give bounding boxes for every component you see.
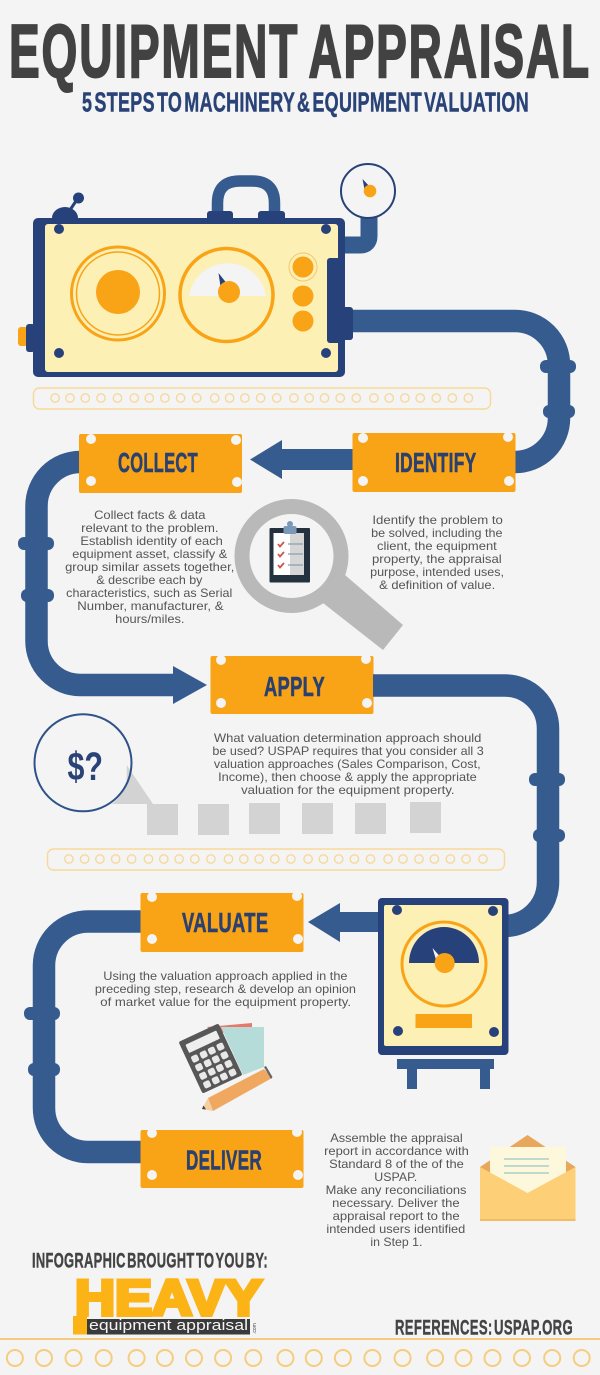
footer ring strip <box>0 1339 600 1366</box>
middle dial <box>180 248 273 342</box>
text: deliver description: in Step 1. <box>370 1235 422 1249</box>
text: apply description: be used? USPAP requires that you consider all 3 <box>212 744 484 758</box>
text: apply description: valuation for the equipment property. <box>241 783 455 797</box>
text: identify description: & definition of value. <box>379 578 495 592</box>
text: collect description: equipment asset, classify & <box>72 547 227 561</box>
text: deliver description: Standard 8 of the of the <box>329 1157 464 1171</box>
left knob <box>18 324 35 352</box>
text: valuate description: of market value for the equipment property. <box>100 995 351 1009</box>
text: apply description: What valuation determination approach should <box>214 731 481 745</box>
text: collect description: & describe each by <box>96 573 202 587</box>
pipe: apply to valuation machine <box>373 686 565 926</box>
text: identify description: client, the equipment <box>377 539 498 553</box>
icon: speech bubble with dollar question: $? <box>68 745 103 789</box>
plate: apply <box>210 654 374 714</box>
stand <box>397 1059 494 1089</box>
plate: identify: IDENTIFY <box>395 447 476 478</box>
text: identify description: purpose, intended uses, <box>370 565 504 579</box>
text: valuate description: preceding step, research & develop an opinion <box>95 982 356 996</box>
text: collect description: hours/miles. <box>115 612 184 626</box>
text: identify description: property, the appraisal <box>372 552 502 566</box>
belt 1 <box>34 388 490 409</box>
text: identify description: Identify the problem to <box>372 513 503 527</box>
text: identify description <box>370 513 504 592</box>
plate: deliver: DELIVER <box>186 1144 262 1176</box>
icon: envelope <box>480 1135 576 1221</box>
text: deliver description: USPAP. <box>374 1170 417 1184</box>
plate: deliver <box>140 1127 304 1188</box>
text: apply description: Income), then choose & apply the appropriate <box>218 770 477 784</box>
pipe: collect to apply <box>18 462 176 685</box>
arrow: machine to valuate <box>308 903 380 942</box>
text: collect description: relevant to the problem. <box>81 521 218 535</box>
text: collect description: Number, manufacturer, & <box>77 599 224 613</box>
pipe: valuate to deliver <box>24 922 142 1152</box>
grey squares <box>147 802 441 835</box>
plate: collect: COLLECT <box>118 447 198 478</box>
text: collect description: characteristics, such as Serial <box>66 586 232 600</box>
valuation machine <box>378 898 508 1089</box>
text: apply description: valuation approaches (Sales Comparison, Cost, <box>214 757 481 771</box>
icon: speech bubble with dollar question <box>34 714 153 811</box>
text: deliver description: Assemble the appraisal <box>330 1131 463 1145</box>
text: apply description <box>212 731 484 797</box>
plate: valuate: VALUATE <box>182 907 268 938</box>
clipboard <box>270 521 310 582</box>
logo: heavy equipment appraisal: .com <box>252 1323 258 1334</box>
text: deliver description: appraisal report to the <box>333 1209 460 1223</box>
text: deliver description: report in accordance with <box>324 1144 469 1158</box>
buttons <box>289 253 317 332</box>
footer: sponsor heading: INFOGRAPHIC BROUGHT TO YOU BY: <box>32 1250 268 1273</box>
belt 2 <box>48 849 504 870</box>
text: deliver description: Make any reconciliations <box>326 1183 466 1197</box>
text: collect description: group similar assets together, <box>65 560 234 574</box>
pressure gauge <box>341 164 395 245</box>
machine illustration <box>18 164 395 377</box>
arrow: identify to collect <box>250 440 354 479</box>
handle <box>207 181 285 221</box>
text: collect description: Establish identity of each <box>80 534 223 548</box>
plate: apply: APPLY <box>264 671 325 702</box>
pipe: machine to identify <box>350 321 576 462</box>
text: identify description: be solved, including the <box>371 526 503 540</box>
lever <box>52 192 84 218</box>
arrow: into apply <box>170 666 207 704</box>
left dial <box>72 247 164 340</box>
logo: heavy equipment appraisal: HEAVY <box>75 1270 262 1326</box>
text: collect description <box>65 508 234 626</box>
text: deliver description: intended users identified <box>326 1222 465 1236</box>
machine body <box>33 218 345 377</box>
label bar <box>416 1014 472 1028</box>
plate: collect <box>79 434 242 493</box>
plate: identify <box>352 432 516 492</box>
logo: heavy equipment appraisal: equipment appraisal <box>89 1317 248 1334</box>
icon: magnifying glass with clipboard <box>242 506 403 650</box>
dial <box>402 922 486 1006</box>
text: collect description: Collect facts & data <box>94 508 206 522</box>
plate: valuate <box>140 891 304 952</box>
text: valuate description: Using the valuation approach applied in the <box>103 969 348 983</box>
text: valuate description <box>95 969 356 1009</box>
right bracket <box>327 258 353 343</box>
text: deliver description: necessary. Deliver the <box>332 1196 460 1210</box>
icon: calculator with paper and pencil <box>179 1023 272 1111</box>
text: deliver description <box>324 1131 469 1249</box>
